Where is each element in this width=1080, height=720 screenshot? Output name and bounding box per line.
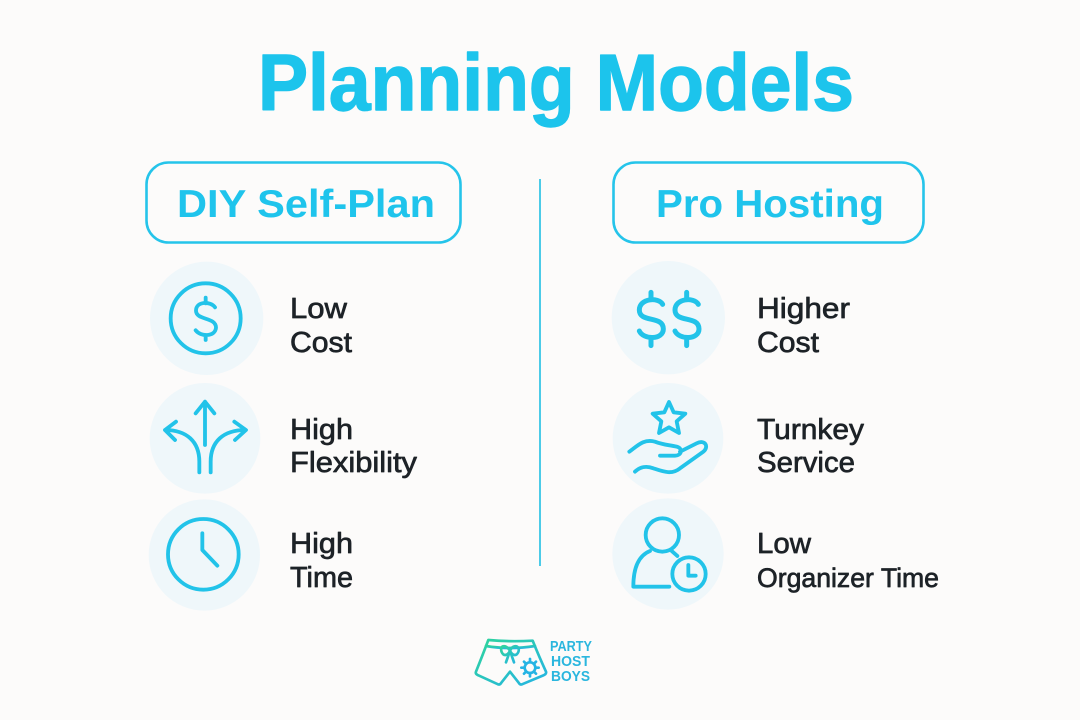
item: low organizer time [612, 498, 939, 610]
label: High Time: Time [290, 562, 353, 594]
item: turnkey service [613, 383, 865, 494]
item: low cost [150, 262, 352, 375]
heading: Pro Hosting [614, 162, 924, 242]
panel: Pro Hosting [612, 162, 939, 610]
heading: Pro Hosting: Pro Hosting [656, 183, 884, 226]
label: Higher Cost: Higher [757, 293, 850, 325]
label: Low Cost: Cost [290, 327, 352, 359]
icon: hand with star [613, 383, 723, 494]
logo text: HOST [551, 654, 590, 670]
label: High Flexibility: Flexibility [290, 447, 418, 479]
icon: double dollar [612, 261, 725, 374]
logo text: BOYS [551, 669, 590, 685]
label: Turnkey Service: Service [757, 447, 855, 479]
label: Low Cost: Low [290, 293, 348, 325]
label: Higher Cost: Cost [757, 327, 819, 359]
label: Turnkey Service: Turnkey [757, 414, 865, 446]
label: High Flexibility: High [290, 414, 353, 446]
item: high time [149, 499, 353, 611]
panel: DIY Self-Plan [146, 162, 460, 611]
icon: person with clock [612, 498, 724, 610]
icon: branching arrows [150, 383, 260, 494]
logo text: PARTY [550, 639, 592, 655]
label: High Time: High [290, 528, 353, 560]
divider [539, 179, 541, 566]
icon: dollar coin [150, 262, 263, 375]
item: high flexibility [150, 383, 418, 494]
label: Low Organizer Time: Organizer Time [757, 563, 939, 593]
icon: swim shorts with gear [476, 640, 546, 684]
label: Low Organizer Time: Low [757, 528, 812, 560]
icon: clock [149, 499, 260, 611]
logo: Party Host Boys [476, 639, 592, 685]
item: higher cost [612, 261, 850, 374]
title: Planning Models [258, 38, 854, 127]
heading: DIY Self-Plan: DIY Self-Plan [177, 183, 435, 226]
heading: DIY Self-Plan [146, 162, 460, 242]
